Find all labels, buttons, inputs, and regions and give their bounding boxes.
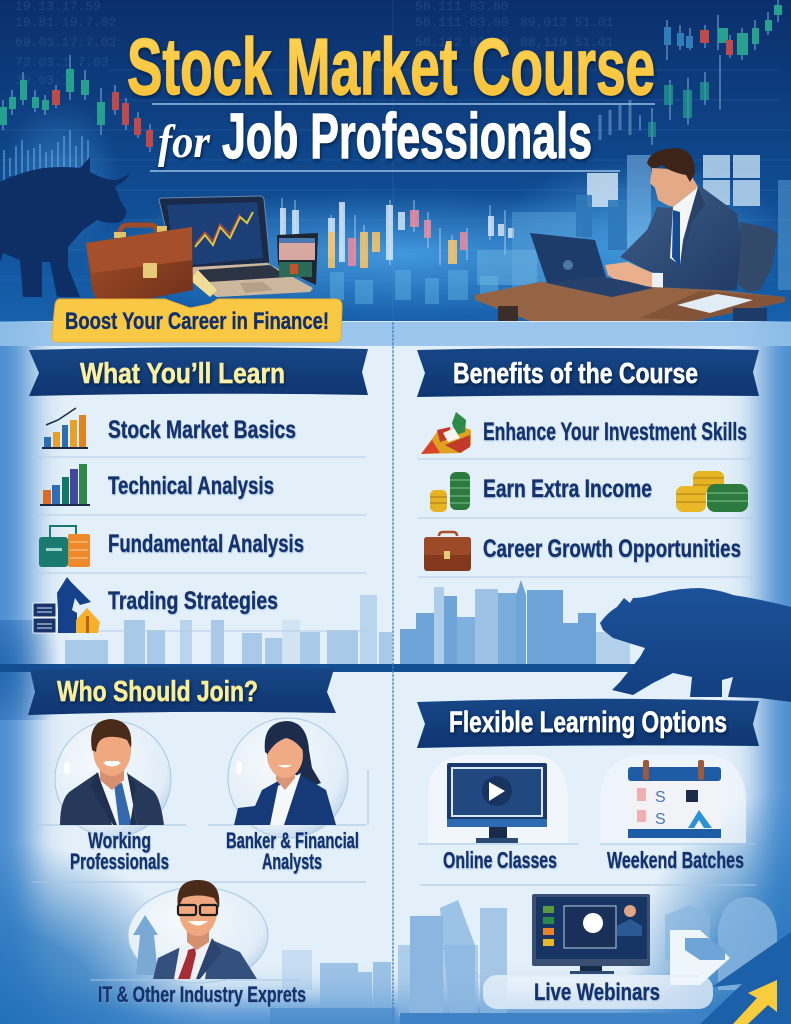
- banner: what you'll learn: What You’ll Learn: [80, 358, 285, 390]
- skyline: what you'll learn: [65, 595, 392, 664]
- label: working professionals: [70, 828, 169, 874]
- panel: benefits list: [421, 412, 748, 571]
- card: live webinars: [483, 894, 713, 1009]
- hands and cuff: [605, 262, 653, 287]
- banner: benefits of the course: Benefits of the Course: [453, 358, 698, 390]
- banner: who should join: [28, 667, 336, 715]
- panel: what you'll learn list: [33, 408, 304, 633]
- header chart: left candlesticks: [0, 55, 153, 180]
- header chart: middle light candlesticks: [280, 198, 514, 304]
- banner: benefits of the course: [417, 348, 759, 397]
- briefcase: [86, 225, 193, 308]
- icon: calendar: S: [655, 789, 666, 806]
- icon: rising triangle background: [700, 932, 791, 1024]
- background: lower light panels: [0, 300, 791, 1024]
- card: weekend batches: [600, 755, 746, 873]
- item: technical analysis: Technical Analysis: [108, 472, 274, 500]
- icon: briefcase small: [424, 532, 471, 571]
- card: online classes: [428, 755, 568, 873]
- icon: stock basics bars: [42, 408, 88, 449]
- icon: coin stacks: [430, 472, 470, 512]
- label: banker and financial analysts: Banker & Financial: [226, 828, 359, 853]
- phone: [277, 233, 318, 285]
- header background: 73.03.1 7.03: [15, 55, 109, 70]
- boost banner: [52, 299, 342, 342]
- header background: 89,013 51.01: [520, 15, 614, 30]
- icon: growth blocks: [421, 412, 471, 454]
- icon: calendar: [628, 760, 721, 838]
- icon: technical bars: [40, 464, 90, 506]
- skyline: benefits: [400, 580, 630, 664]
- label: working professionals: Working: [88, 828, 151, 853]
- arrow: yellow growth arrow: [733, 980, 777, 1024]
- label: working professionals: Professionals: [70, 849, 169, 874]
- header background: [0, 0, 791, 321]
- header background: 88,119 51.01: [520, 35, 614, 50]
- laptop with chart: [159, 196, 313, 297]
- header chart: right candlesticks: [600, 0, 782, 145]
- item: fundamental analysis: Fundamental Analysis: [108, 530, 304, 558]
- icon: monitor with play: [447, 763, 547, 843]
- item: stock market basics: Stock Market Basics: [108, 416, 296, 444]
- banner: flexible learning options: [417, 699, 759, 748]
- head: [650, 168, 698, 207]
- header skyline behind man: [477, 155, 791, 300]
- person: working professional: [55, 719, 171, 837]
- labels: top people: [70, 828, 359, 874]
- banner: what you'll learn: [29, 347, 368, 396]
- skyline: bottom left: [270, 950, 395, 1024]
- icon: chess knight, docs and arrow: [33, 577, 100, 633]
- header background: 19.81 19.7.02: [15, 15, 116, 30]
- header background: 58.111 83.00: [415, 15, 509, 30]
- title: [127, 22, 655, 172]
- icon: calendar: S: [655, 811, 666, 828]
- label: IT and other industry experts: IT & Other Industry Exprets: [98, 982, 306, 1007]
- man at desk: [475, 148, 785, 321]
- icon: coins right: [676, 471, 748, 512]
- chair: [738, 222, 778, 292]
- item: trading strategies: Trading Strategies: [108, 587, 278, 615]
- person: banker and financial analyst: [228, 718, 348, 838]
- skyline: bottom right: [398, 897, 791, 1024]
- header background: 58.112 93.00: [415, 35, 509, 50]
- icon: bull silhouette: [0, 157, 130, 297]
- laptop: [530, 233, 612, 297]
- label: live webinars: Live Webinars: [534, 979, 660, 1006]
- icon: webinar monitor: [532, 894, 650, 974]
- label: banker and financial analysts: [226, 828, 359, 874]
- title line: for Job Professionals: for: [158, 116, 211, 168]
- label: online classes: Online Classes: [443, 847, 557, 873]
- boost text: Boost Your Career in Finance!: [65, 308, 329, 335]
- item: earn extra income: Earn Extra Income: [483, 475, 652, 503]
- person: IT and other industry expert: [128, 880, 268, 983]
- header background: 39.03.1: [15, 73, 70, 88]
- section divider band and center line: [0, 322, 791, 1024]
- label: banker and financial analysts: Analysts: [262, 849, 322, 874]
- suit body: [620, 187, 741, 292]
- banner: who should join: Who Should Join?: [57, 676, 258, 708]
- icon: bear silhouette: [600, 588, 791, 702]
- header background: 69.03.17.7.02: [15, 35, 116, 50]
- title: Job Professionals: [222, 100, 592, 172]
- icon: fundamental analysis case and docs: [39, 526, 90, 567]
- desk: [475, 282, 785, 321]
